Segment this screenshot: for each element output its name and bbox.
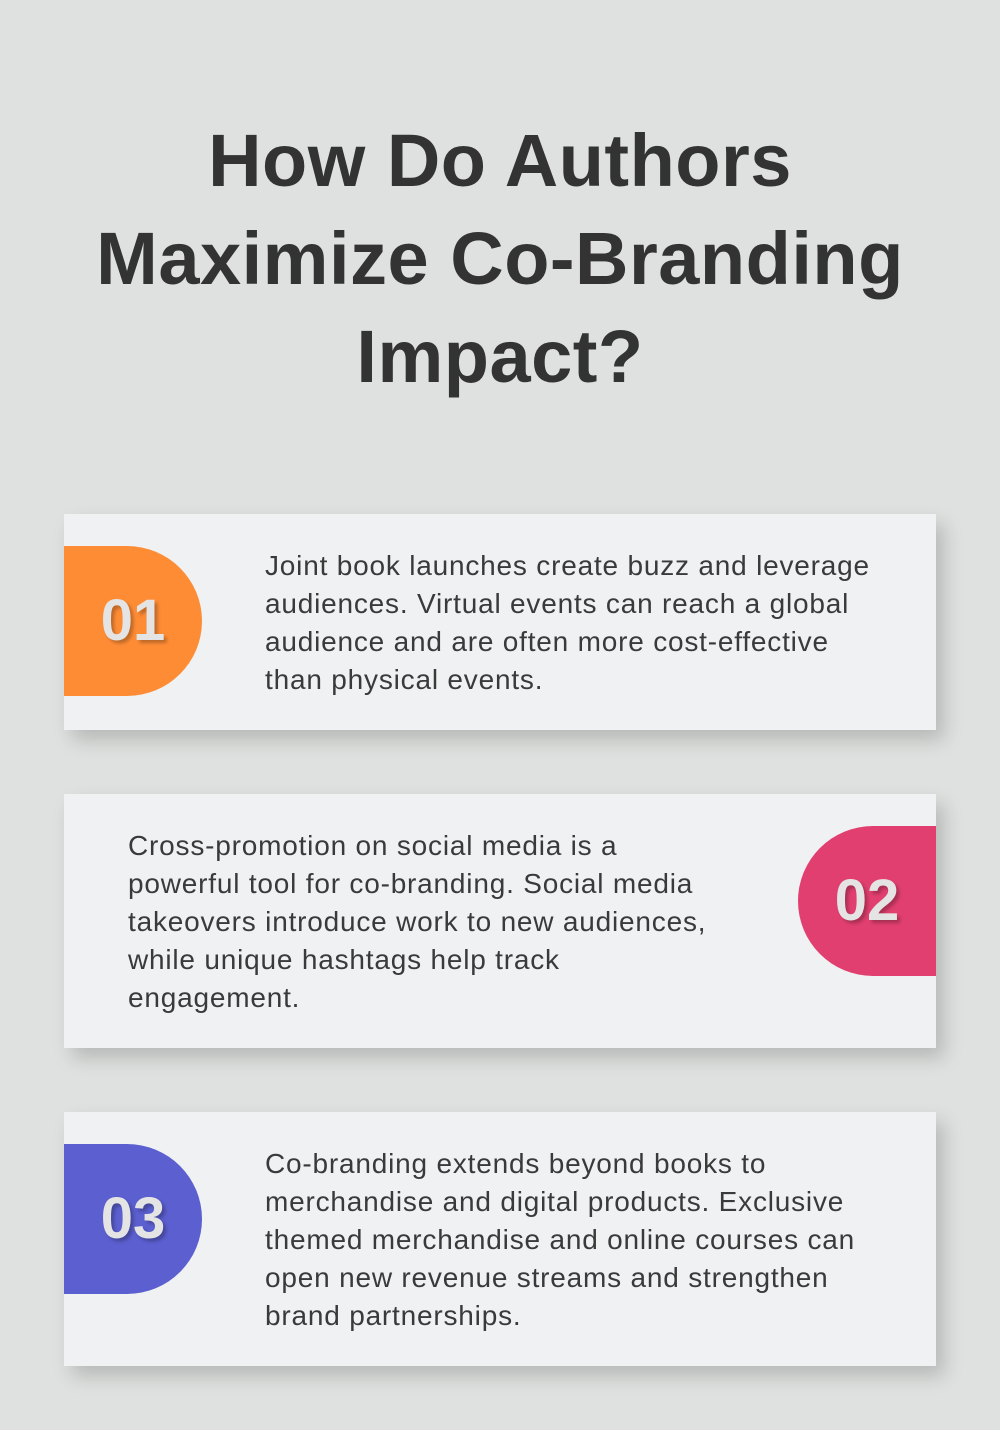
text 03: themed merchandise and online courses can [265, 1224, 855, 1255]
text 03: open new revenue streams and strengthen [265, 1262, 829, 1293]
badge 02: 02 [835, 868, 899, 933]
badge 01: 01 [101, 588, 165, 653]
text 03: merchandise and digital products. Exclusive [265, 1186, 844, 1217]
badge 03 [64, 1144, 202, 1294]
text 01: Joint book launches create buzz and leverage [265, 550, 870, 581]
badge 03: 03 [101, 1186, 165, 1251]
text 02 [128, 830, 706, 1013]
text 02: takeovers introduce work to new audiences, [128, 906, 706, 937]
badge 02 [798, 826, 936, 976]
title: Maximize Co-Branding [96, 217, 904, 300]
panel: step 02 [64, 794, 936, 1048]
title: Impact? [356, 315, 644, 398]
text 03 [265, 1148, 855, 1331]
text 02: Cross-promotion on social media is a [128, 830, 617, 861]
title: How Do Authors [208, 119, 792, 202]
text 01: audiences. Virtual events can reach a global [265, 588, 849, 619]
title [96, 119, 904, 398]
text 02: while unique hashtags help track [128, 944, 560, 975]
badge 01 [64, 546, 202, 696]
text 03: brand partnerships. [265, 1300, 521, 1331]
panel: step 03 [64, 1112, 936, 1366]
text 01: audience and are often more cost-effective [265, 626, 829, 657]
text 02: powerful tool for co-branding. Social media [128, 868, 693, 899]
text 01: than physical events. [265, 664, 543, 695]
text 03: Co-branding extends beyond books to [265, 1148, 766, 1179]
text 01 [265, 550, 870, 695]
text 02: engagement. [128, 982, 300, 1013]
panel: step 01 [64, 514, 936, 730]
